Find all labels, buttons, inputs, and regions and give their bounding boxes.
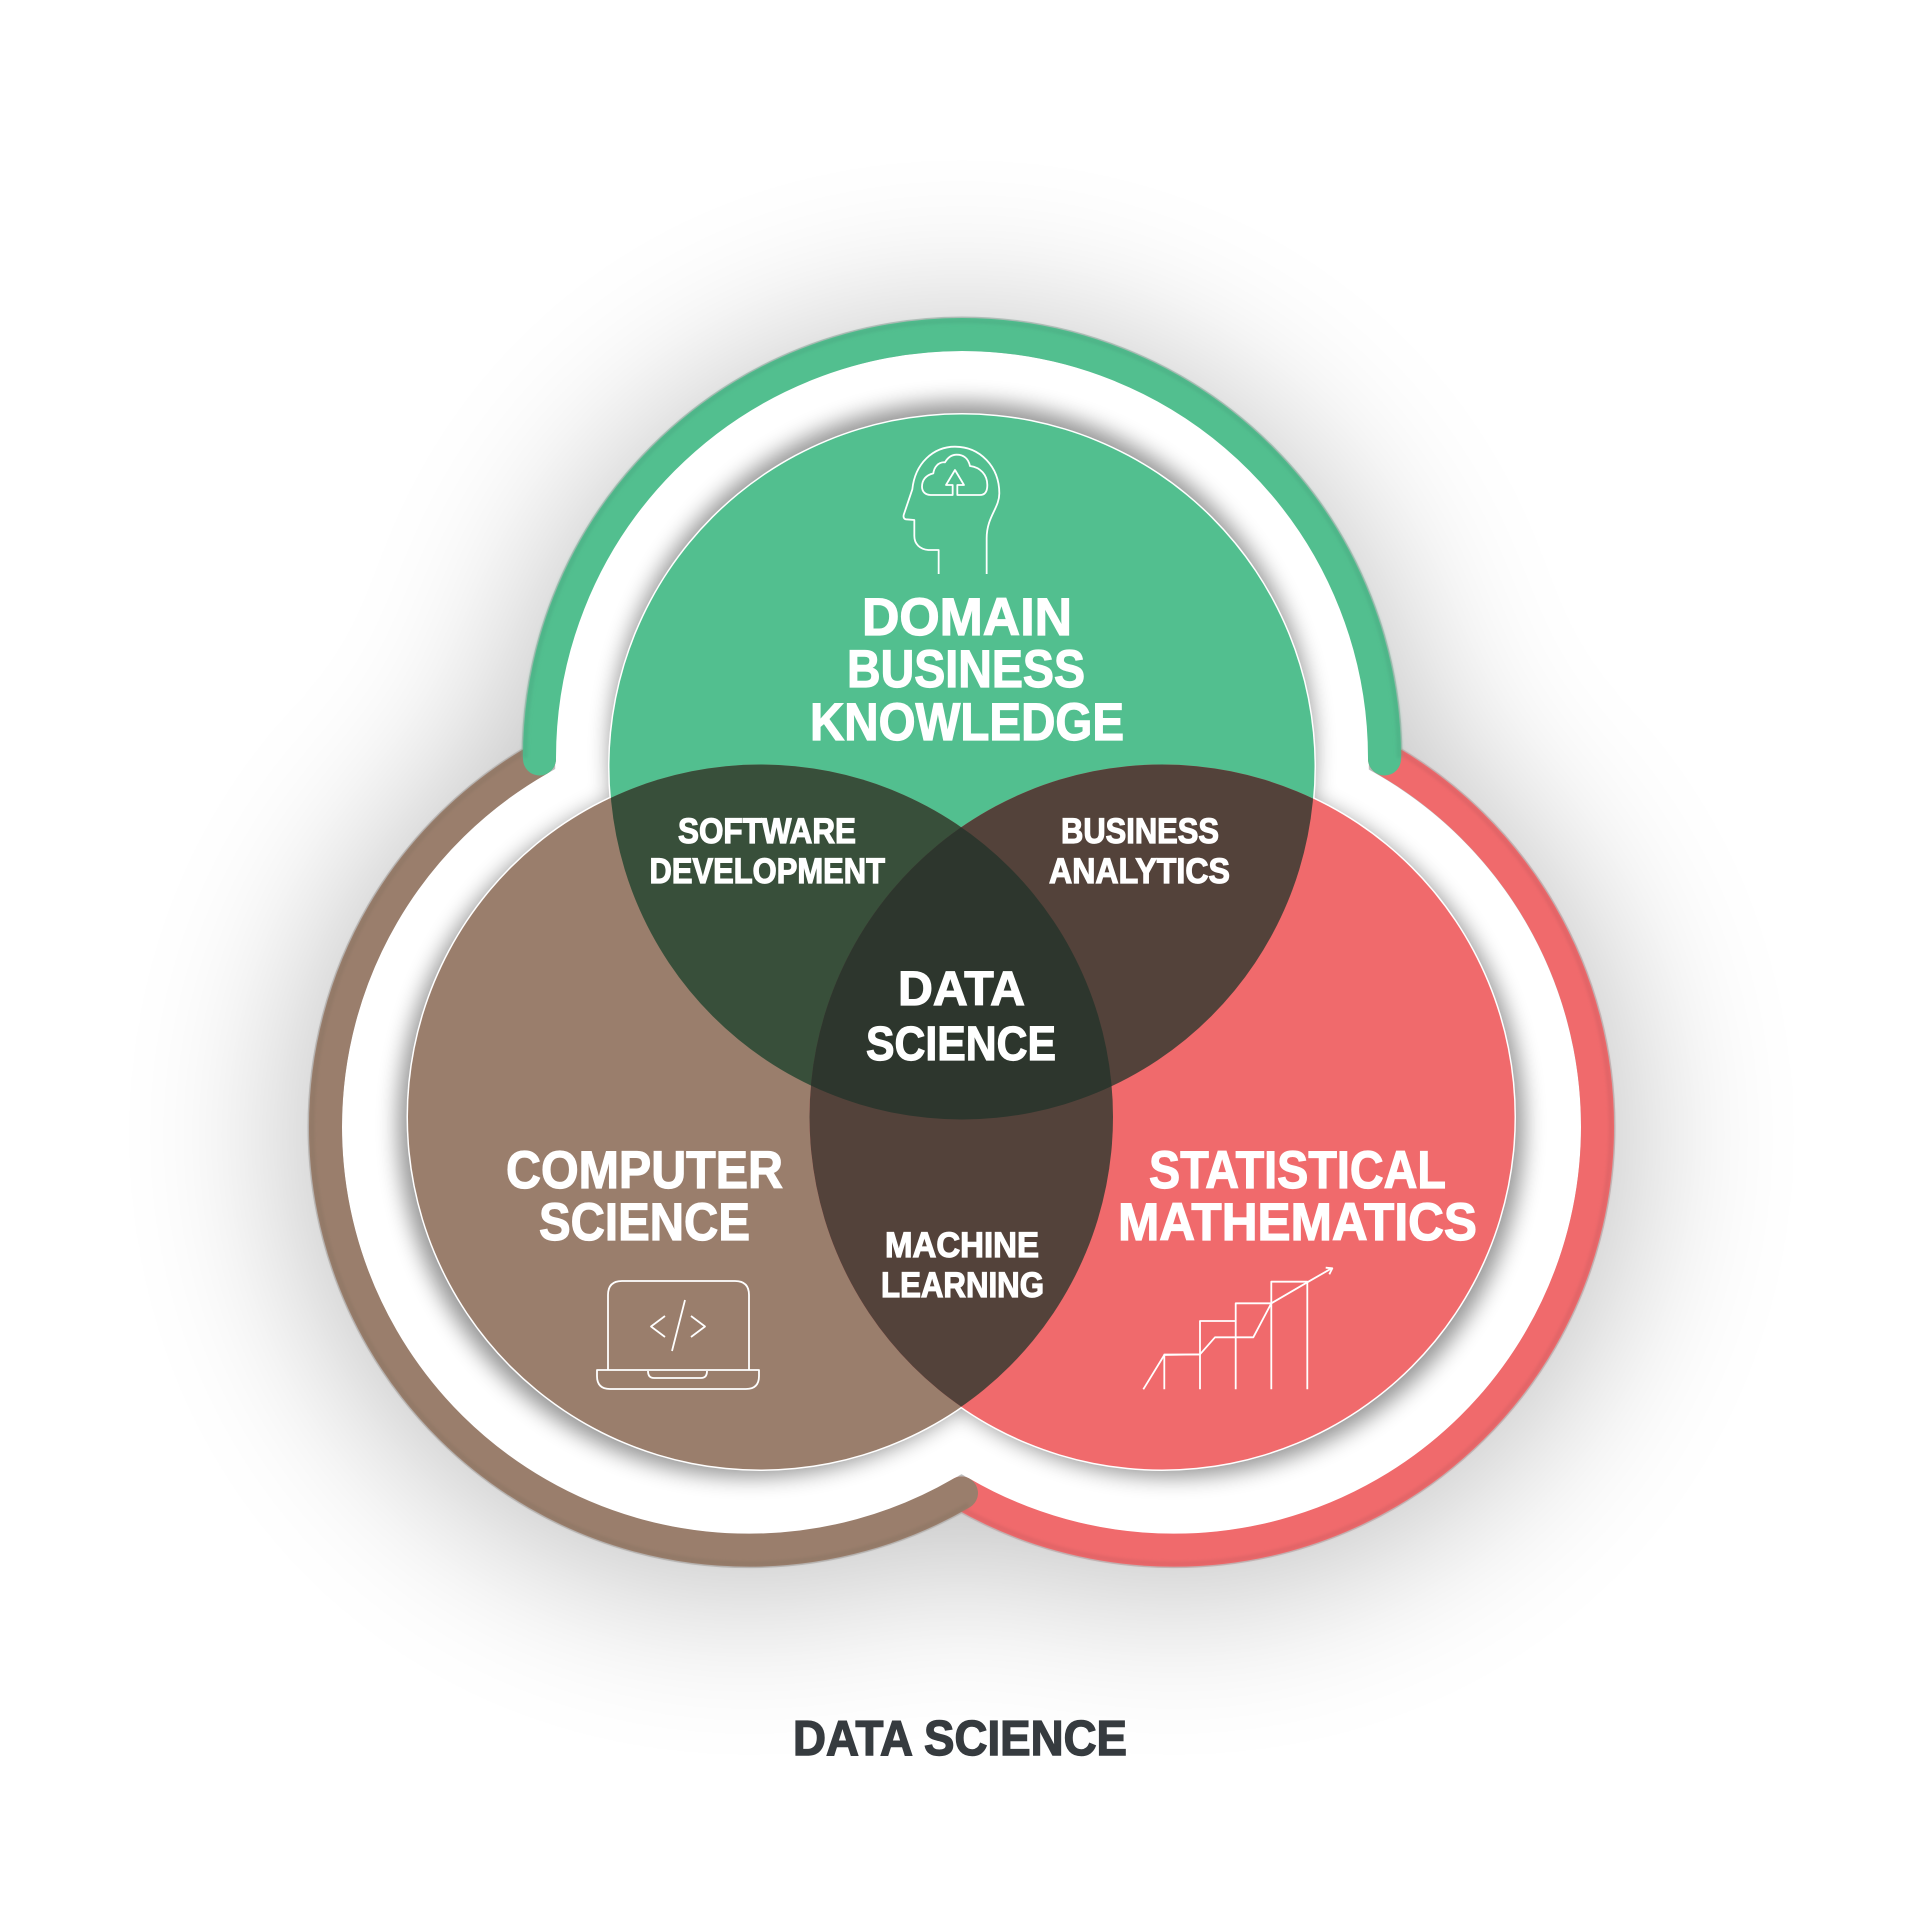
heading: computer science [506, 1141, 783, 1252]
heading: statistical mathematics: STATISTICAL [1149, 1141, 1446, 1200]
outer ring: statistical mathematics [955, 747, 1611, 1564]
label: machine learning: MACHINE [885, 1226, 1039, 1265]
icon: laptop with code [597, 1281, 759, 1389]
heading: computer science: SCIENCE [539, 1193, 750, 1252]
infographic: data science venn diagram [212, 242, 1712, 1756]
circle: domain business knowledge [610, 414, 1314, 1120]
label: business analytics: ANALYTICS [1049, 852, 1230, 891]
overlap: machine learning [810, 1086, 1113, 1407]
ring edge highlights [326, 334, 1598, 1550]
label: software development: DEVELOPMENT [650, 852, 885, 891]
soft background shadow [294, 325, 1629, 1590]
heading: domain business knowledge: BUSINESS [847, 640, 1085, 699]
heading: statistical mathematics [1118, 1141, 1477, 1252]
overlap: data science centre [811, 827, 1112, 1120]
heading: domain business knowledge: DOMAIN [862, 588, 1072, 647]
label: data science centre: SCIENCE [866, 1018, 1056, 1071]
heading: statistical mathematics: MATHEMATICS [1118, 1193, 1477, 1252]
circle: computer science [408, 764, 1113, 1470]
label: machine learning: LEARNING [881, 1266, 1044, 1305]
label: data science centre [866, 963, 1056, 1071]
heading: domain business knowledge: KNOWLEDGE [810, 693, 1124, 752]
label: business analytics: BUSINESS [1061, 812, 1219, 851]
inner circle white rims [406, 413, 1516, 1471]
outer ring: domain business knowledge [525, 321, 1399, 759]
label: data science centre: DATA [898, 963, 1025, 1016]
heading: computer science: COMPUTER [506, 1141, 783, 1200]
inner circle shadows [398, 402, 1524, 1477]
overlap: software development [610, 764, 962, 1086]
label: software development: SOFTWARE [678, 812, 856, 851]
icon: head with cloud upload [904, 447, 999, 574]
label: software development [650, 812, 885, 891]
label: business analytics [1049, 812, 1230, 891]
outer ring: computer science [312, 747, 968, 1564]
label: machine learning [881, 1226, 1044, 1305]
overlap: business analytics [961, 764, 1313, 1086]
circle: statistical mathematics [810, 764, 1514, 1470]
heading: domain business knowledge [810, 588, 1124, 752]
white base plate [342, 351, 1581, 1534]
icon: rising bar chart with arrow [1143, 1268, 1332, 1389]
title: DATA SCIENCE [793, 1712, 1127, 1766]
